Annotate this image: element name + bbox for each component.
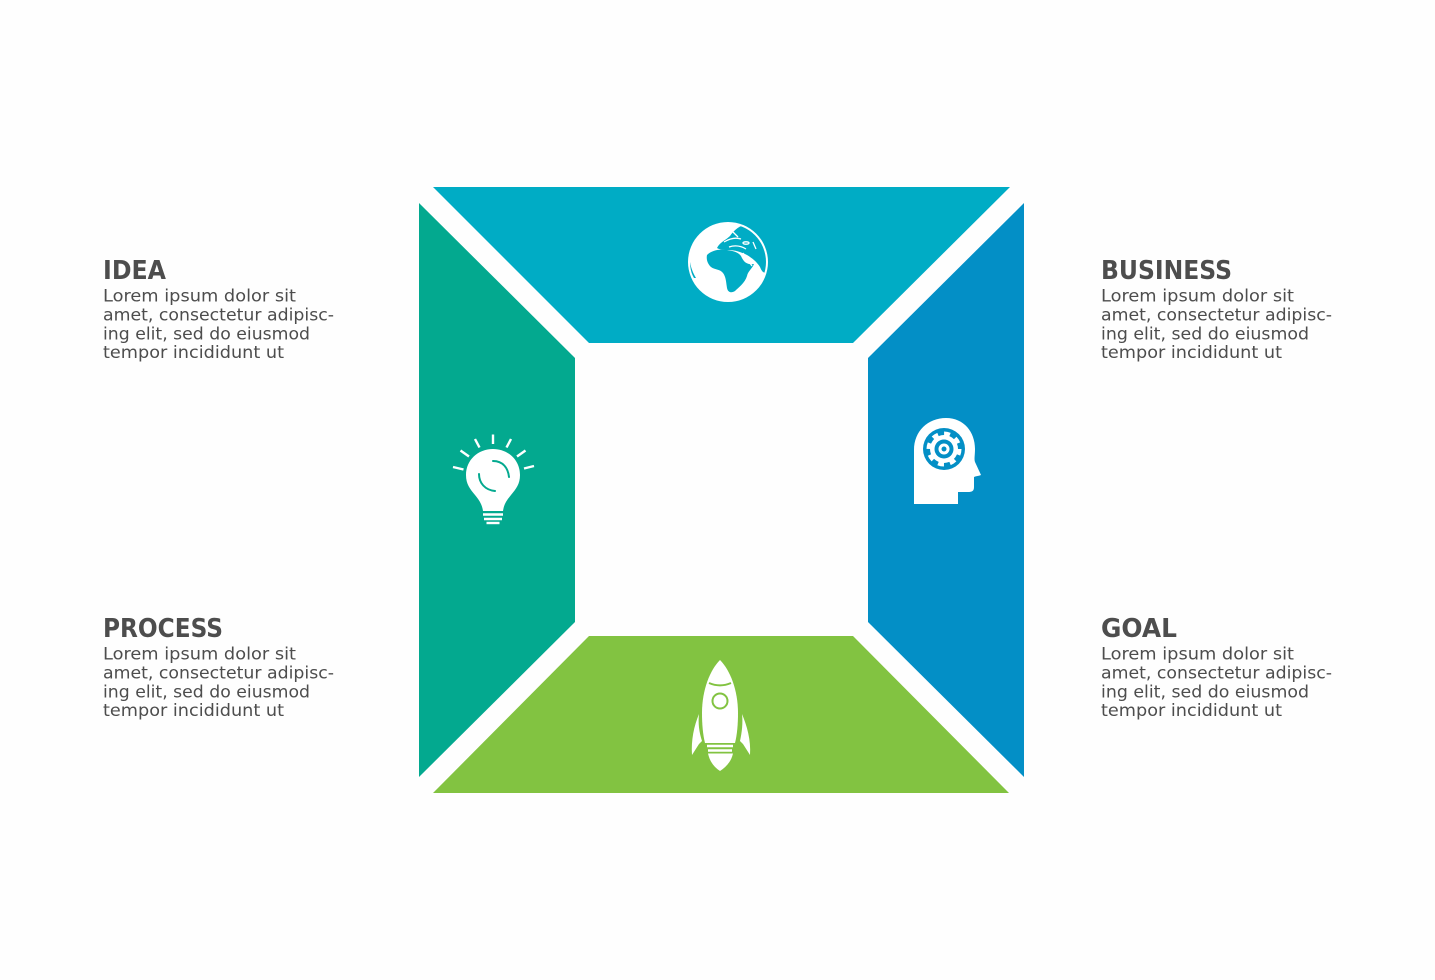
text block: PROCESS (103, 614, 334, 721)
text block: BUSINESS (1101, 256, 1332, 363)
text block: BUSINESS: BUSINESS (1101, 256, 1232, 286)
text block: PROCESS: PROCESS (103, 614, 223, 644)
text block: GOAL: Lorem ipsum dolor sit (1101, 644, 1294, 664)
panel: right (868, 203, 1024, 777)
icon: rocket (692, 660, 750, 771)
text block: GOAL: amet, consectetur adipisc- (1101, 664, 1332, 684)
text block: PROCESS: amet, consectetur adipisc- (103, 664, 334, 684)
icon: lightbulb (453, 434, 534, 523)
text block: IDEA: IDEA (103, 256, 166, 286)
panel: top (433, 187, 1010, 343)
text block: IDEA: ing elit, sed do eiusmod (103, 324, 310, 344)
text block: GOAL: ing elit, sed do eiusmod (1101, 682, 1309, 702)
text block: PROCESS: tempor incididunt ut (103, 701, 284, 721)
text block: IDEA: tempor incididunt ut (103, 343, 284, 363)
text block: BUSINESS: tempor incididunt ut (1101, 343, 1282, 363)
text block: PROCESS: Lorem ipsum dolor sit (103, 644, 296, 664)
text block: BUSINESS: Lorem ipsum dolor sit (1101, 286, 1294, 306)
text block: GOAL (1101, 614, 1332, 721)
text block: BUSINESS: amet, consectetur adipisc- (1101, 306, 1332, 326)
text block: GOAL: GOAL (1101, 614, 1177, 644)
icon: globe (688, 222, 768, 302)
panel: left (419, 203, 575, 777)
text block: IDEA: amet, consectetur adipisc- (103, 306, 334, 326)
text block: PROCESS: ing elit, sed do eiusmod (103, 682, 310, 702)
text block: IDEA (103, 256, 334, 363)
panel: bottom (433, 636, 1009, 793)
text block: GOAL: tempor incididunt ut (1101, 701, 1282, 721)
text block: IDEA: Lorem ipsum dolor sit (103, 286, 296, 306)
icon: head with gear (914, 418, 981, 504)
text block: BUSINESS: ing elit, sed do eiusmod (1101, 324, 1309, 344)
